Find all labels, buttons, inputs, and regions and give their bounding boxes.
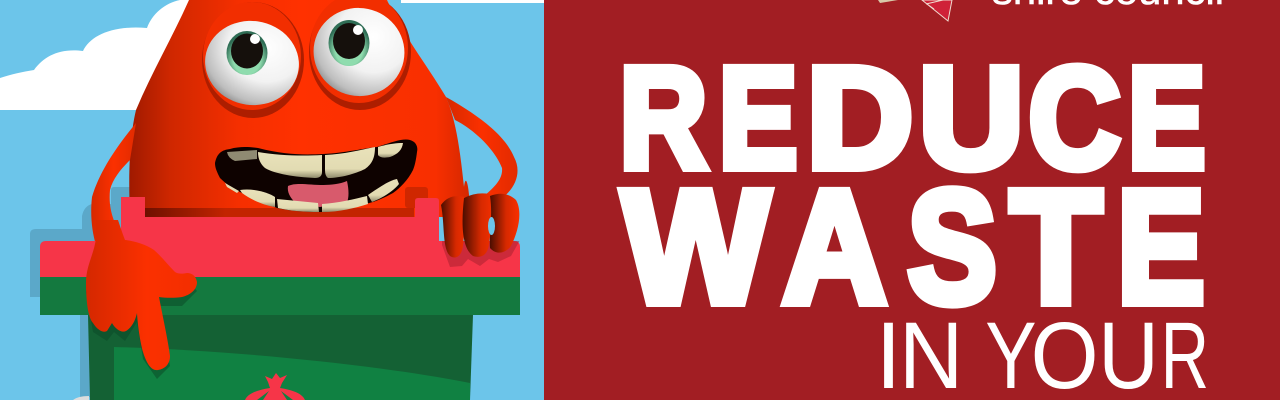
heading: reduce: D bbox=[807, 38, 913, 198]
cloud bbox=[0, 0, 250, 110]
heading: waste: S bbox=[908, 157, 997, 336]
heading: waste: A bbox=[782, 157, 886, 336]
heading: waste: T bbox=[1010, 157, 1102, 336]
logo mark bbox=[878, 0, 952, 21]
left hand and pointing finger bbox=[86, 220, 197, 370]
heading: waste: W bbox=[622, 157, 769, 336]
ground patch bbox=[73, 396, 89, 400]
heading: reduce: E bbox=[1128, 38, 1206, 198]
finger 3 bbox=[490, 194, 519, 253]
mouth bbox=[215, 140, 417, 212]
heading: reduce bbox=[619, 38, 1206, 198]
bin tab shadow bbox=[405, 187, 428, 208]
right arm bbox=[446, 97, 518, 200]
heading: reduce: R bbox=[619, 38, 707, 198]
left eye bbox=[200, 15, 304, 111]
right eye bbox=[305, 0, 413, 104]
bin front panel bbox=[114, 347, 470, 400]
body shadow above lid bbox=[145, 208, 414, 217]
bin front bbox=[88, 315, 473, 400]
tongue bbox=[288, 181, 348, 207]
finger gap bbox=[488, 217, 495, 235]
sky background panel bbox=[0, 0, 544, 400]
heading: reduce: U bbox=[919, 38, 1024, 198]
heading: reduce: E bbox=[719, 38, 798, 198]
red panel bbox=[544, 0, 1280, 400]
mascot body bbox=[129, 0, 470, 217]
right eye socket bbox=[309, 0, 411, 110]
heading: in your bbox=[876, 303, 1209, 400]
bin shadow bbox=[30, 187, 135, 397]
lower teeth bbox=[225, 183, 239, 193]
upper teeth bbox=[227, 150, 257, 161]
heading: waste bbox=[622, 157, 1205, 336]
bin lid bbox=[40, 197, 520, 277]
left arm bbox=[91, 123, 136, 245]
bin bbox=[40, 187, 520, 400]
finger 1 bbox=[441, 196, 468, 258]
white cloud strip top right bbox=[401, 0, 544, 3]
heading: waste: E bbox=[1117, 157, 1205, 336]
bin rim bbox=[40, 277, 520, 315]
left eye socket bbox=[202, 2, 304, 118]
icon: rubbish bag bbox=[245, 373, 305, 400]
finger 2 bbox=[463, 193, 496, 257]
heading: reduce: C bbox=[1029, 38, 1121, 198]
right hand fingers bbox=[441, 193, 519, 258]
hand shadows bbox=[86, 225, 520, 379]
